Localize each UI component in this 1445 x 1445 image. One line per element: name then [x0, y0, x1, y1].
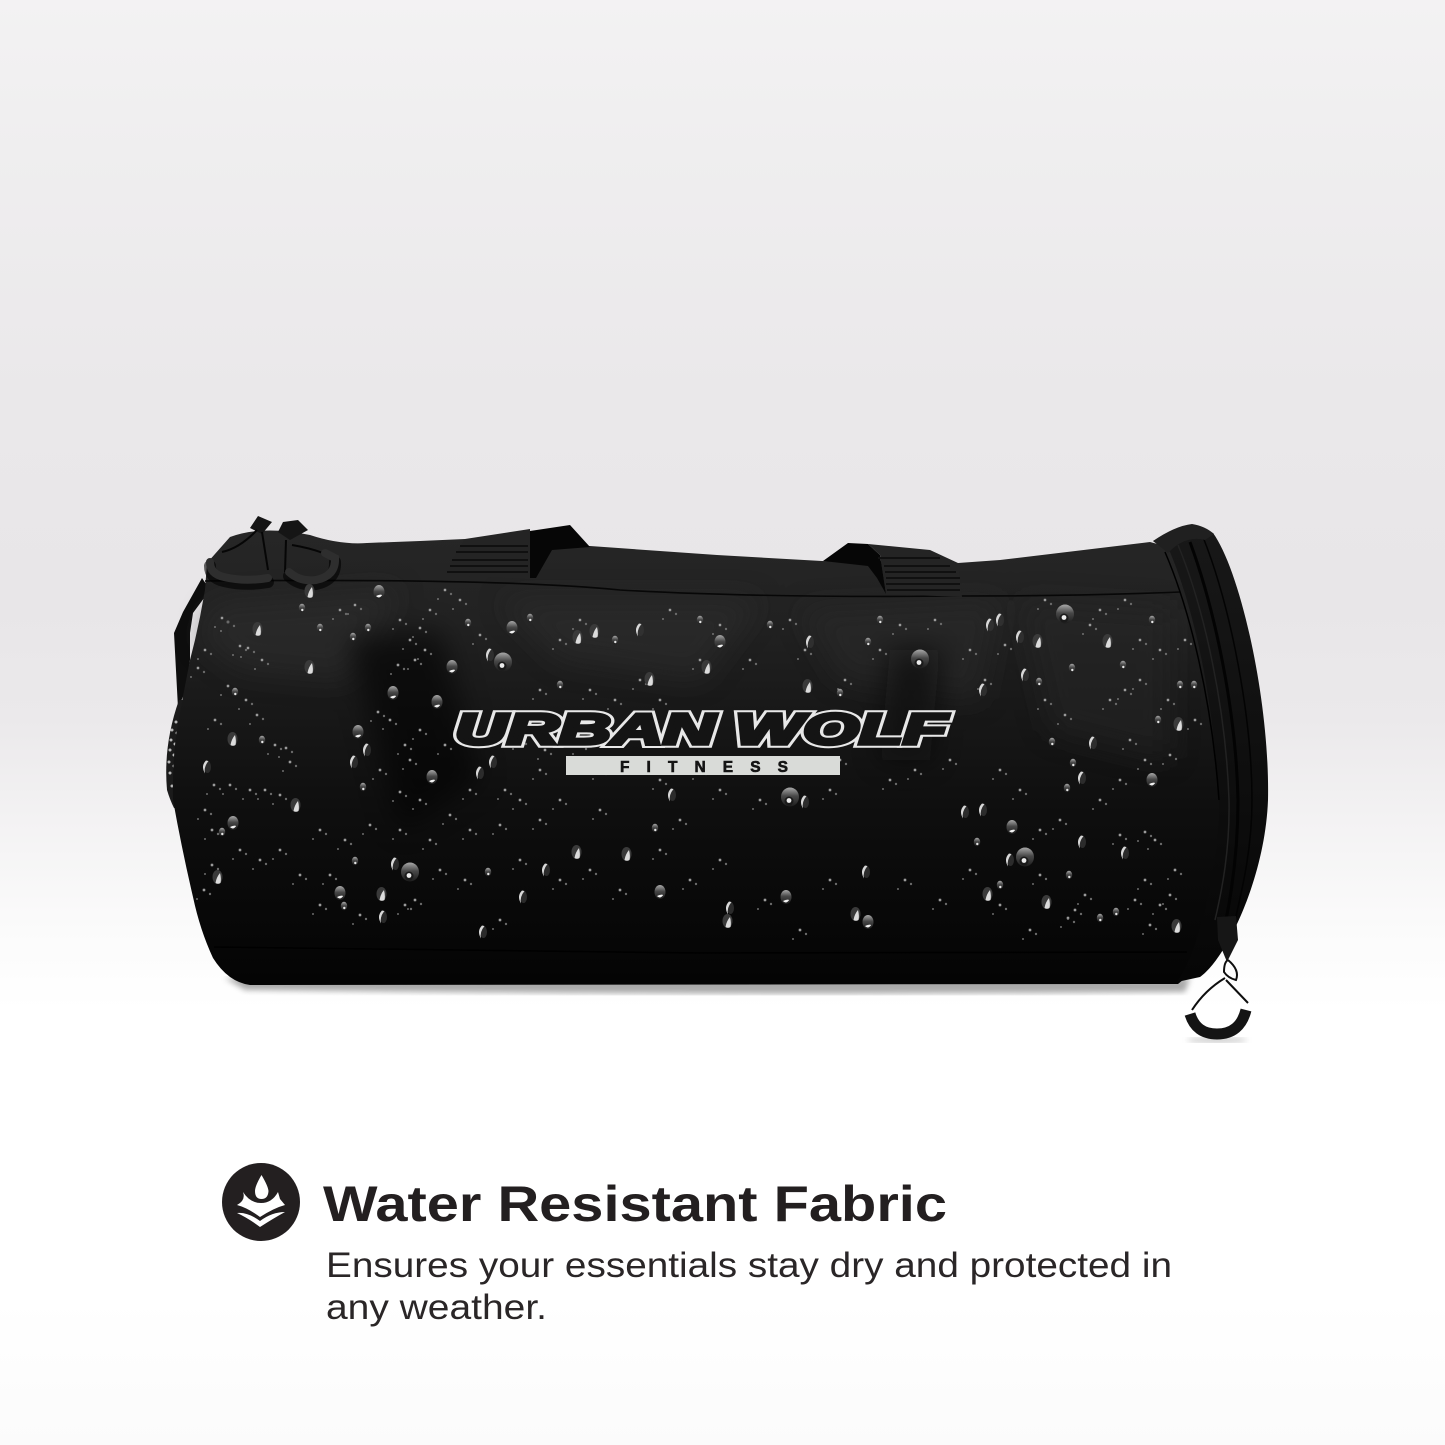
side mesh pocket — [166, 700, 196, 812]
duffel bag — [166, 516, 1268, 1034]
description — [326, 1246, 1172, 1327]
logo — [455, 705, 949, 776]
seams — [205, 580, 1187, 953]
left side strap — [174, 578, 210, 708]
description: any weather. — [326, 1288, 547, 1327]
handles — [444, 525, 962, 597]
logo wordmark: URBAN WOLF — [455, 705, 949, 754]
top-left zipper pulls — [210, 516, 335, 584]
ground shadow — [225, 978, 1247, 1042]
logo wordmark — [455, 705, 949, 754]
water droplets — [191, 584, 1201, 939]
logo wordmark: URBAN WOLF — [455, 705, 949, 754]
fabric folds — [200, 590, 1170, 830]
logo fitness label: FITNESS — [620, 759, 788, 776]
icon: water resistant layers — [222, 1163, 300, 1241]
description: Ensures your essentials stay dry and protected in — [326, 1246, 1172, 1285]
bag body — [173, 530, 1240, 985]
right end panel — [1153, 524, 1268, 982]
heading: Water Resistant Fabric — [323, 1176, 947, 1232]
bottom-right zipper pull — [1190, 916, 1248, 1034]
logo fitness bar — [566, 756, 840, 775]
